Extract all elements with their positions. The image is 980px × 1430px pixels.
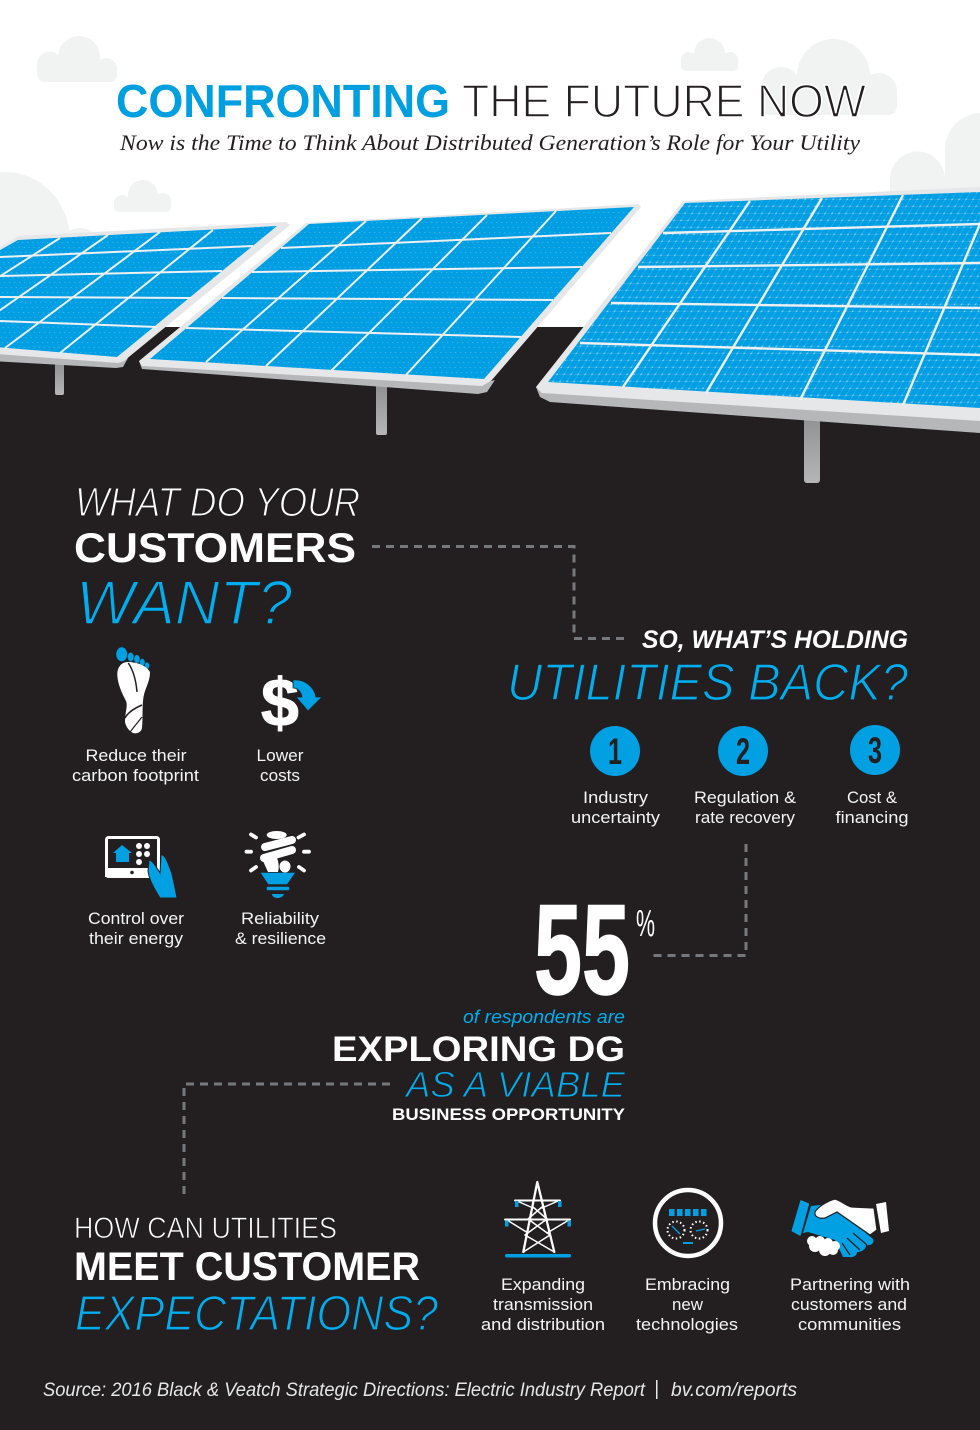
heading: how can utilities meet customer expectations: EXPECTATIONS? (75, 1287, 439, 1341)
label: control over their energy (88, 909, 184, 948)
icon: transmission tower (505, 1182, 571, 1258)
numbered item 3: 3 (868, 730, 882, 771)
solar panel: right (536, 187, 980, 483)
icon: smart meter (655, 1190, 721, 1256)
numbered item 2 (694, 726, 797, 827)
text block: exploring DG: BUSINESS OPPORTUNITY (392, 1105, 626, 1124)
dashed connector: holding back to 55 percent (652, 844, 746, 956)
label: control over their energy: their energy (89, 929, 184, 948)
numbered item 3: Cost & (847, 788, 898, 807)
clouds (0, 36, 980, 250)
label: expanding transmission and distribution: and distribution (481, 1315, 605, 1334)
icon: dollar with down arrow (261, 665, 322, 741)
numbered item 1 (571, 726, 661, 827)
numbered item 2: Regulation & (694, 788, 797, 807)
heading: how can utilities meet customer expectations: MEET CUSTOMER (74, 1245, 420, 1289)
source line: bv.com/reports (671, 1380, 797, 1401)
icon: dollar with down arrow: $ (261, 665, 299, 741)
label: expanding transmission and distribution: transmission (493, 1295, 593, 1314)
heading: so what's holding utilities back: UTILITIES BACK? (507, 654, 908, 712)
source line: Source: 2016 Black & Veatch Strategic Directions: Electric Industry Report (43, 1380, 646, 1401)
label: partnering with customers and communities: communities (798, 1315, 901, 1334)
label: partnering with customers and communities (790, 1275, 910, 1334)
text block: exploring DG: AS A VIABLE (404, 1064, 626, 1105)
label: embracing new technologies: technologies (636, 1315, 738, 1334)
numbered item 3: financing (836, 808, 908, 827)
label: embracing new technologies: new (672, 1295, 704, 1314)
label: lower costs: costs (260, 766, 300, 785)
title: THE FUTURE NOW (462, 75, 867, 127)
label: expanding transmission and distribution (481, 1275, 605, 1334)
label: control over their energy: Control over (88, 909, 184, 928)
numbered item 1: uncertainty (571, 808, 661, 827)
label: lower costs (256, 746, 304, 785)
heading: what do your customers want (74, 479, 360, 638)
numbered item 1: 1 (608, 731, 622, 772)
numbered item 2: rate recovery (695, 808, 796, 827)
label: embracing new technologies (636, 1275, 738, 1334)
heading: so what's holding utilities back (507, 626, 908, 712)
text block: exploring DG: of respondents are (463, 1007, 625, 1027)
icon: handshake (792, 1199, 889, 1257)
heading: what do your customers want: WHAT DO YOUR (75, 479, 360, 525)
icon: energy saving bulb (246, 831, 309, 898)
dashed connector: exploring DG to expectations (184, 1084, 390, 1195)
title (116, 75, 867, 127)
heading: so what's holding utilities back: SO, WHAT’S HOLDING (642, 626, 908, 654)
label: lower costs: Lower (256, 746, 304, 765)
label: reduce their carbon footprint: carbon footprint (72, 766, 199, 785)
label: reliability and resilience (235, 909, 326, 948)
icon: footprint (116, 647, 150, 733)
numbered item 1: Industry (583, 788, 649, 807)
text block: exploring DG: EXPLORING DG (332, 1030, 625, 1069)
dark lower background (0, 327, 980, 1430)
label: expanding transmission and distribution: Expanding (501, 1275, 585, 1294)
title: CONFRONTING (116, 75, 450, 127)
page background: white sky (0, 0, 980, 327)
label: reliability and resilience: & resilience (235, 929, 326, 948)
label: embracing new technologies: Embracing (645, 1275, 730, 1294)
label: partnering with customers and communities: Partnering with (790, 1275, 910, 1294)
heading: what do your customers want: WANT? (76, 569, 293, 638)
label: partnering with customers and communities: customers and (791, 1295, 907, 1314)
subtitle: Now is the Time to Think About Distributed Generation’s Role for Your Utility (119, 130, 860, 155)
heading: how can utilities meet customer expectations: HOW CAN UTILITIES (74, 1212, 337, 1245)
solar panel: left (0, 222, 290, 395)
statistic: 55 percent: % (636, 903, 655, 945)
icon: tablet with hand (105, 838, 177, 898)
heading: what do your customers want: CUSTOMERS (74, 524, 356, 571)
label: reduce their carbon footprint: Reduce their (86, 746, 187, 765)
solar panel: centre (139, 204, 641, 435)
dashed connector: customers to utilities (372, 546, 630, 638)
label: reliability and resilience: Reliability (241, 909, 320, 928)
numbered item 2: 2 (736, 731, 750, 772)
statistic: 55 percent: 55 (534, 879, 630, 1022)
numbered item 3 (836, 725, 908, 827)
label: reduce their carbon footprint (72, 746, 199, 785)
text block: exploring DG (332, 1007, 626, 1124)
heading: how can utilities meet customer expectations (74, 1212, 439, 1341)
